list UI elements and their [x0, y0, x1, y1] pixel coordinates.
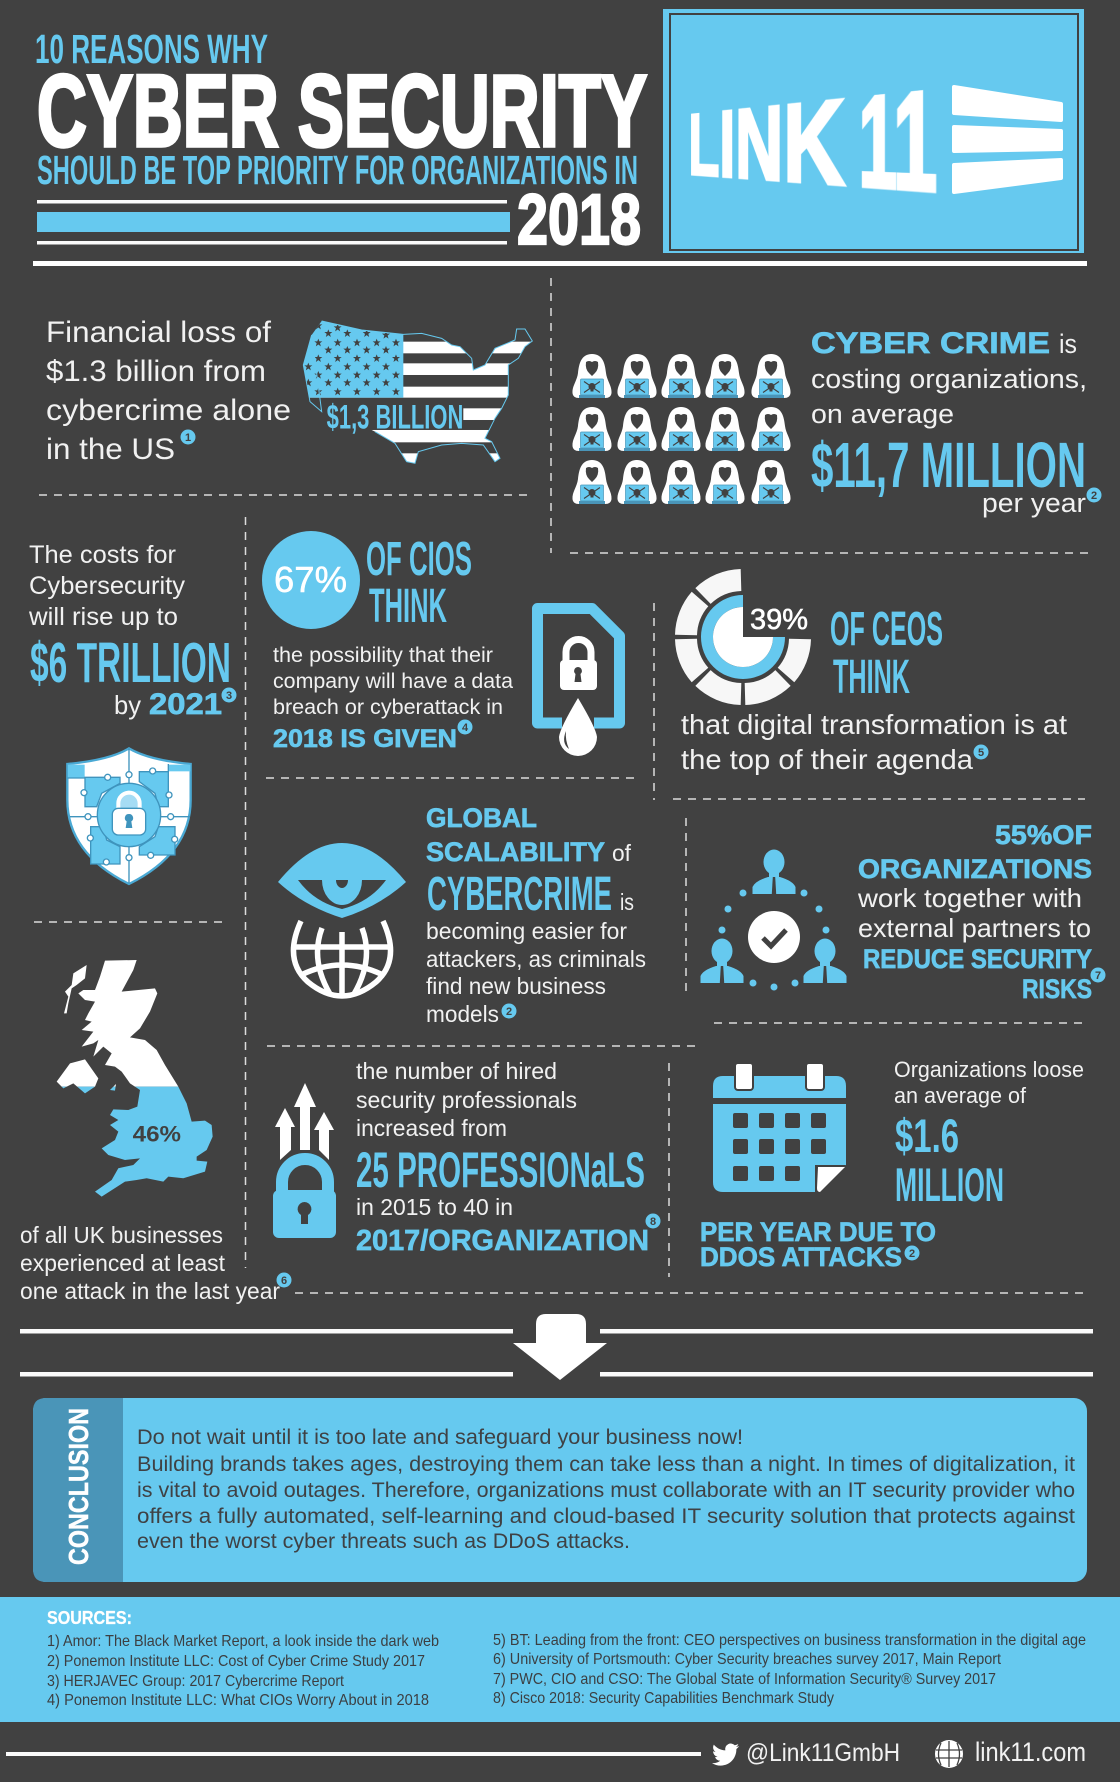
subtitle: SHOULD BE TOP PRIORITY FOR ORGANIZATIONS IN: [37, 147, 638, 193]
heading: of CEOs think: OF CEOS: [830, 603, 943, 656]
text: global scalability: attackers, as criminals: [426, 946, 646, 972]
footer: social links: link11.com: [975, 1737, 1086, 1767]
heading: of CIOs think: THINK: [369, 580, 447, 633]
heading: of CIOs think: [366, 533, 472, 633]
text: digital transformation: 5: [978, 747, 984, 759]
icon: globe: [293, 921, 391, 996]
panel: conclusion: [33, 1398, 1087, 1582]
text: data breach: breach or cyberattack in: [273, 696, 503, 719]
text: global scalability: 2: [506, 1006, 512, 1018]
panel: sources: 4) Ponemon Institute LLC: What CIOs Worry About in 2018: [47, 1692, 429, 1709]
text: costs for cybersecurity: $6 TRILLION: [30, 631, 231, 695]
panel: sources: 1) Amor: The Black Market Report, a look inside the dark web: [47, 1633, 439, 1650]
text: financial loss: [46, 316, 291, 466]
text: 55% of organizations: RISKS: [1022, 974, 1092, 1004]
text: data breach: 4: [462, 722, 469, 734]
text: DDoS cost: [700, 1057, 1084, 1272]
text: 55% of organizations: REDUCE SECURITY: [863, 944, 1092, 974]
panel: sources: SOURCES:: [47, 1608, 132, 1628]
text: cyber crime: costing organizations,: [811, 364, 1087, 394]
text: data breach: [273, 644, 513, 753]
text: cyber crime: on average: [811, 399, 954, 429]
text: costs for cybersecurity: [28, 541, 237, 721]
text: DDoS cost: $1.6: [895, 1109, 959, 1162]
donut chart: 39%: 39%: [750, 604, 808, 636]
footer: social links: @Link11GmbH: [746, 1739, 900, 1767]
text: financial loss: cybercrime alone: [46, 394, 291, 427]
text: digital transformation: the top of their agenda: [681, 744, 973, 775]
text: financial loss: in the US: [46, 433, 175, 466]
UK map: 46%: [133, 1122, 181, 1147]
text: digital transformation: that digital transformation is at: [681, 709, 1067, 740]
67% badge: [262, 531, 360, 629]
text: DDoS cost: DDOS ATTACKS: [700, 1242, 902, 1272]
text: financial loss: $1.3 billion from: [46, 355, 266, 388]
text: costs for cybersecurity: 2021: [149, 688, 222, 721]
text: hired professionals: 2017/ORGANIZATION: [356, 1225, 649, 1257]
logo wordmark: [663, 50, 1007, 231]
panel: sources: [0, 1597, 1120, 1722]
footer: social links: [6, 1737, 1086, 1768]
text: global scalability: find new business: [426, 973, 606, 999]
panel: sources: 3) HERJAVEC Group: 2017 Cybercrime Report: [47, 1673, 344, 1690]
panel: sources: 8) Cisco 2018: Security Capabilities Benchmark Study: [493, 1690, 834, 1707]
67% badge: 67%: [274, 559, 347, 600]
hackers icon grid: [572, 354, 791, 504]
panel: conclusion: Do not wait until it is too late and safeguard your business now!: [137, 1426, 743, 1449]
panel: conclusion: CONCLUSION: [63, 1408, 94, 1565]
text: DDoS cost: 2: [909, 1248, 915, 1260]
icon: lock with arrows: [273, 1083, 336, 1238]
text: 55% of organizations: 7: [1095, 970, 1101, 982]
text: 55% of organizations: [857, 820, 1106, 1004]
text: 55% of organizations: ORGANIZATIONS: [858, 854, 1092, 884]
text: hired professionals: increased from: [356, 1115, 507, 1141]
text: 55% of organizations: work together with: [857, 883, 1082, 913]
heading: of CEOs think: THINK: [833, 651, 910, 704]
text: UK businesses: of all UK businesses: [20, 1222, 223, 1248]
text: financial loss: 1: [185, 432, 191, 444]
text: cyber crime: is: [1059, 329, 1077, 359]
icon: circuit shield: [67, 748, 191, 884]
text: costs for cybersecurity: will rise up to: [28, 603, 178, 631]
text: data breach: the possibility that their: [273, 644, 493, 667]
text: data breach: company will have a data: [273, 670, 513, 693]
text: global scalability: CYBERCRIME: [427, 868, 612, 921]
text: global scalability: SCALABILITY: [426, 837, 605, 867]
text: DDoS cost: an average of: [894, 1083, 1027, 1108]
title: 10 reasons why: 10 REASONS WHY: [35, 26, 268, 72]
panel: conclusion: is vital to avoid outages. Therefore, organizations must collaborate with an IT security provider who: [137, 1479, 1075, 1502]
text: cyber crime: [811, 327, 1102, 518]
logo bars: [952, 85, 1063, 194]
text: DDoS cost: PER YEAR DUE TO: [700, 1217, 936, 1247]
icon: partners network: [700, 850, 846, 990]
text: digital transformation: [681, 709, 1067, 775]
text: 55% of organizations: 55%OF: [995, 820, 1092, 850]
text: global scalability: GLOBAL: [426, 803, 537, 833]
text: hired professionals: 25 PROFESSIONaLS: [356, 1142, 645, 1198]
text: UK businesses: one attack in the last year: [20, 1278, 280, 1304]
panel: sources: 7) PWC, CIO and CSO: The Global State of Information Security® Survey 2017: [493, 1671, 996, 1688]
text: DDoS cost: MILLION: [895, 1158, 1004, 1211]
divider with down arrow: [20, 1314, 1093, 1380]
title year: 2018: [517, 181, 641, 260]
text: costs for cybersecurity: 3: [226, 690, 232, 702]
donut chart: 39%: [686, 580, 808, 694]
text: cyber crime: CYBER CRIME: [811, 327, 1050, 360]
text: UK businesses: 6: [281, 1275, 287, 1287]
panel: sources: 2) Ponemon Institute LLC: Cost of Cyber Crime Study 2017: [47, 1653, 425, 1670]
title stripes: [37, 200, 510, 244]
text: hired professionals: in 2015 to 40 in: [356, 1194, 513, 1220]
US flag map: [302, 320, 533, 464]
text: hired professionals: [356, 1058, 660, 1257]
text: global scalability: becoming easier for: [426, 918, 627, 944]
text: cyber crime: per year: [982, 488, 1086, 518]
text: costs for cybersecurity: The costs for: [29, 541, 176, 569]
text: costs for cybersecurity: Cybersecurity: [29, 572, 186, 600]
text: hired professionals: the number of hired: [356, 1058, 557, 1084]
panel: sources: 6) University of Portsmouth: Cyber Security breaches survey 2017, Main Report: [493, 1651, 1001, 1668]
US flag map: $1,3 BILLION: [327, 398, 463, 436]
text: costs for cybersecurity: by: [114, 690, 141, 720]
icon: leaking document: [538, 608, 620, 756]
heading: of CEOs think: [830, 603, 943, 704]
text: global scalability: [426, 803, 646, 1027]
panel: conclusion: offers a fully automated, self-learning and cloud-based IT security solution that protects against: [137, 1505, 1075, 1528]
text: financial loss: Financial loss of: [46, 316, 272, 349]
text: data breach: 2018 IS GIVEN: [273, 725, 457, 753]
logo wordmark: 11: [859, 50, 1007, 231]
panel: conclusion: Building brands takes ages, destroying them can take less than a night. In times of digitalization, it: [137, 1453, 1075, 1476]
text: global scalability: of: [612, 840, 632, 866]
text: hired professionals: 8: [650, 1216, 656, 1228]
text: UK businesses: [20, 1222, 292, 1304]
header rule: [33, 261, 1087, 266]
text: global scalability: models: [426, 1001, 499, 1027]
logo wordmark: LINK: [663, 51, 687, 192]
text: UK businesses: experienced at least: [20, 1250, 226, 1276]
text: cyber crime: 2: [1091, 490, 1097, 502]
icon: calendar: [713, 1062, 846, 1193]
icon: watching eye: [278, 843, 406, 918]
title: cyber security: CYBER SECURITY: [37, 54, 647, 168]
text: global scalability: is: [620, 889, 634, 915]
heading: of CIOs think: OF CIOS: [366, 533, 472, 586]
panel: conclusion: even the worst cyber threats such as DDoS attacks.: [137, 1530, 630, 1553]
UK map: [57, 960, 213, 1197]
text: DDoS cost: Organizations loose: [894, 1057, 1084, 1082]
text: hired professionals: security professionals: [356, 1087, 577, 1113]
text: 55% of organizations: external partners to: [858, 913, 1091, 943]
logo panel: [663, 9, 1084, 253]
